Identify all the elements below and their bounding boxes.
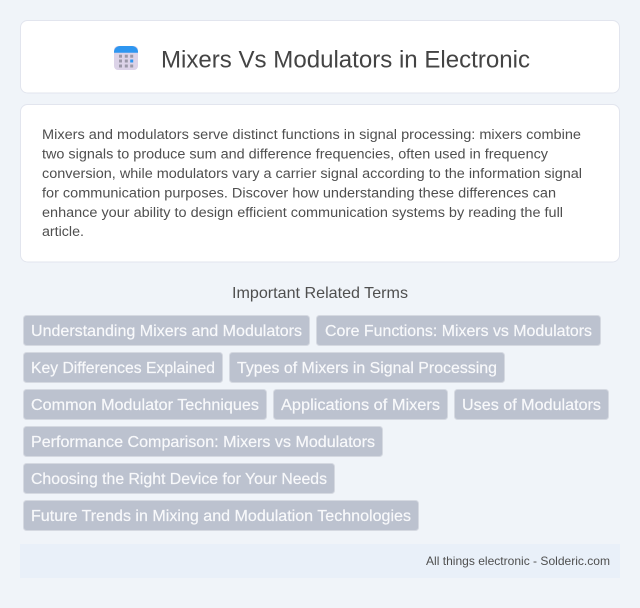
tag: Future Trends in Mixing and Modulation Technologies	[31, 508, 411, 525]
text block: description: for communication purposes. Discover how understanding these differences can	[42, 186, 556, 202]
tag: Applications of Mixers	[281, 397, 440, 414]
footer	[20, 544, 620, 578]
tag	[454, 390, 608, 420]
tag	[24, 352, 222, 382]
tag	[24, 426, 382, 456]
tag: Core Functions: Mixers vs Modulators	[325, 323, 592, 340]
icon: calendar	[114, 46, 138, 70]
tag	[24, 464, 334, 494]
text block: description: two signals to produce sum and difference frequencies, often used in frequency	[42, 146, 549, 162]
heading: related terms: Important Related Terms	[232, 285, 408, 302]
tag: Common Modulator Techniques	[31, 397, 259, 414]
title: Mixers Vs Modulators in Electronic	[161, 46, 530, 74]
tag: Understanding Mixers and Modulators	[31, 323, 302, 340]
text block: description	[42, 127, 582, 240]
panel: description	[20, 104, 620, 262]
tag	[24, 390, 266, 420]
tag: Performance Comparison: Mixers vs Modulators	[31, 434, 375, 451]
tag: Uses of Modulators	[462, 397, 601, 414]
tags: related terms	[24, 316, 608, 530]
panel: header	[20, 20, 620, 93]
tag	[24, 500, 418, 530]
tag	[316, 316, 600, 346]
tag: Choosing the Right Device for Your Needs	[31, 471, 327, 488]
tag	[24, 316, 310, 346]
text block: description: article.	[42, 224, 84, 240]
text block: description: enhance your ability to design efficient communication systems by reading the full	[42, 205, 563, 221]
text block: description: conversion, while modulators vary a carrier signal according to the information signal	[42, 166, 582, 182]
tag	[230, 352, 504, 382]
text block: description: Mixers and modulators serve distinct functions in signal processing: mixers combine	[42, 127, 581, 143]
footer credit: All things electronic - Solderic.com	[426, 554, 610, 568]
tag	[274, 390, 448, 420]
tag: Key Differences Explained	[31, 360, 215, 377]
tag: Types of Mixers in Signal Processing	[237, 360, 497, 377]
